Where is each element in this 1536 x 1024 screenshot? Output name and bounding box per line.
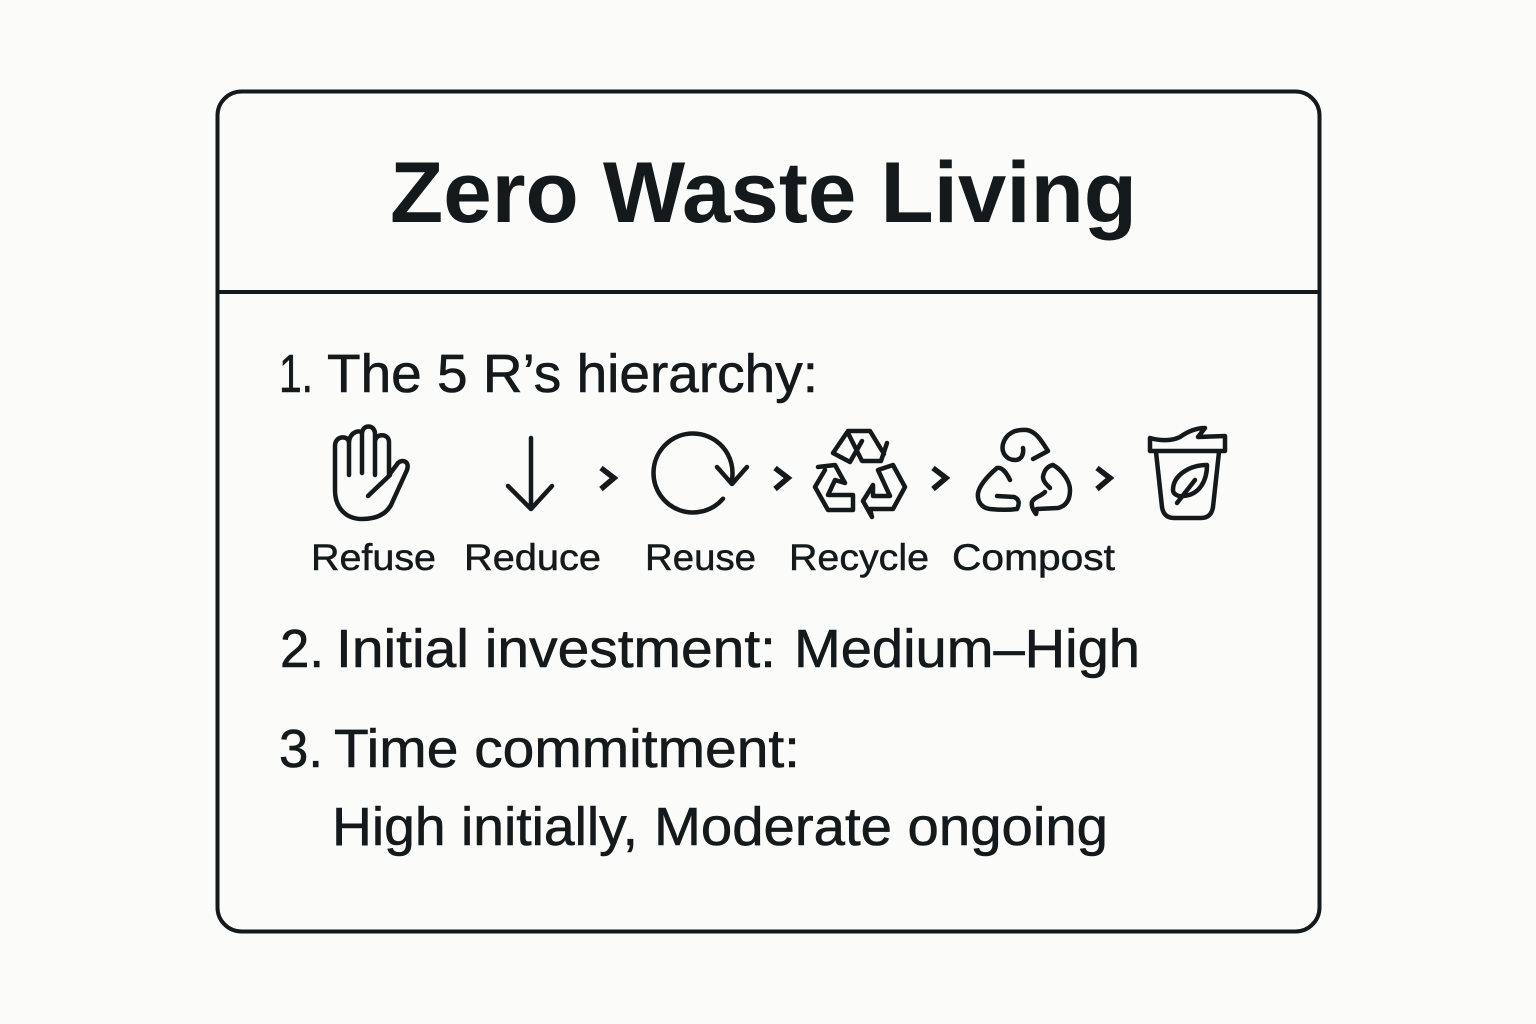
title: Zero Waste Living — [390, 145, 1137, 241]
icon: compost loop — [978, 430, 1070, 514]
icon: recycle triangle — [815, 431, 905, 517]
icon: compost bin with leaf — [1150, 428, 1225, 518]
heading: the 5 R's hierarchy: The 5 R’s hierarchy: — [327, 344, 818, 404]
panel: zero waste card — [218, 92, 1320, 932]
icon: circular reuse arrow — [654, 434, 747, 513]
text: initial investment — [280, 619, 1140, 679]
icon labels — [311, 537, 1116, 578]
arrow: chevron 4 — [1097, 468, 1110, 489]
text: initial investment: 2. — [280, 619, 324, 679]
heading: the 5 R's hierarchy: 1. — [279, 344, 313, 404]
text: initial investment: Medium–High — [794, 619, 1140, 679]
text: time commitment: 3. — [279, 719, 323, 779]
icon labels: Reduce — [464, 537, 601, 578]
text: time commitment: Time commitment: — [334, 719, 800, 779]
text: time commitment — [279, 719, 1108, 857]
text: time commitment: Moderate ongoing — [654, 797, 1108, 857]
icon labels: Compost — [952, 537, 1116, 578]
icon labels: Refuse — [311, 537, 436, 578]
arrow: chevron 2 — [775, 468, 788, 489]
icon labels: Reuse — [645, 537, 756, 578]
text: initial investment: Initial investment: — [336, 619, 776, 679]
icon row: 5 R's flow — [335, 426, 1225, 519]
arrow: chevron 1 — [601, 468, 614, 489]
arrow: chevron 3 — [933, 468, 946, 489]
icon labels: Recycle — [789, 537, 929, 578]
icon: down arrow — [508, 438, 552, 509]
icon: raised hand — [335, 426, 408, 519]
text: time commitment: High initially, — [332, 797, 638, 857]
